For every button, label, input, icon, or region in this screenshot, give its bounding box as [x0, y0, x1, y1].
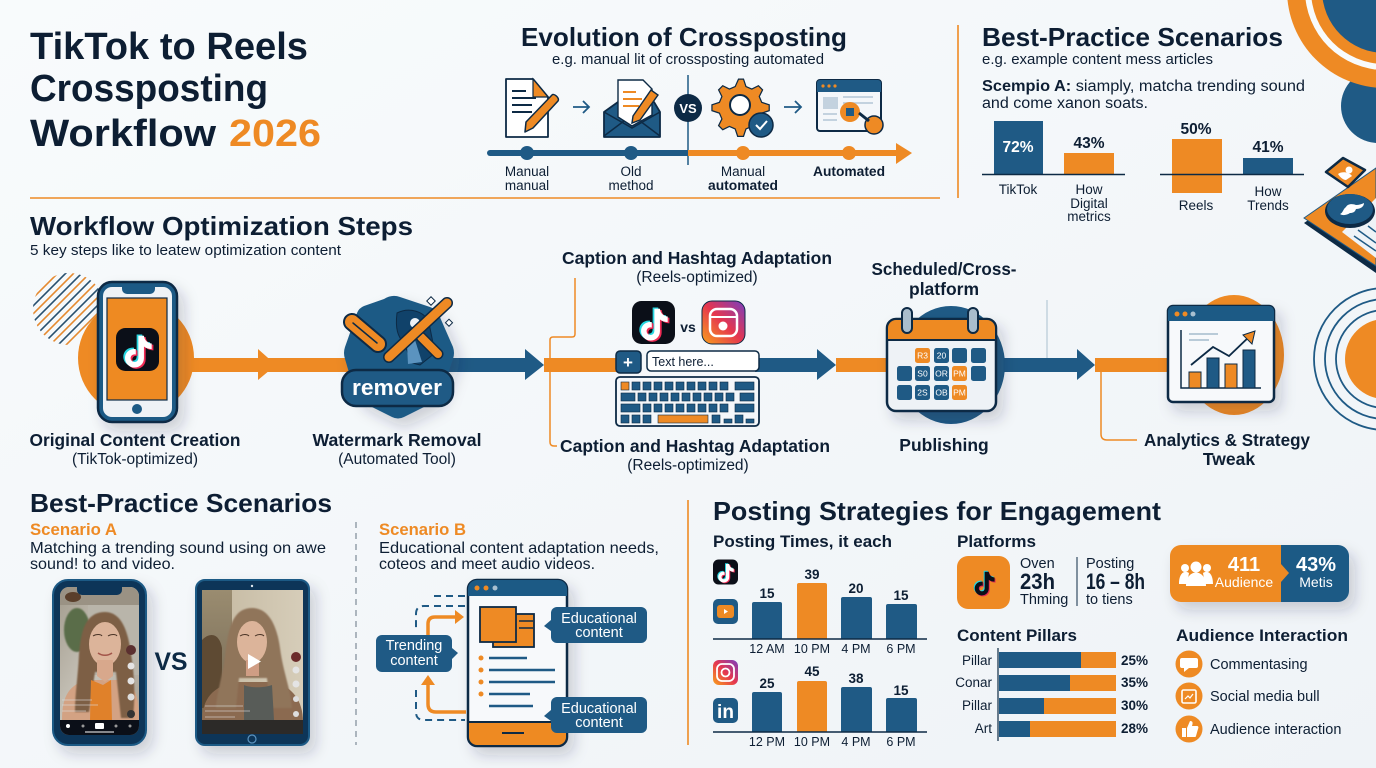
scenario b text [379, 520, 659, 573]
stacked bars: content pillars: 28% [1121, 721, 1148, 736]
bar chart: right: How [1254, 184, 1282, 199]
calendar cells: S0 [917, 368, 928, 378]
connectors [550, 278, 1137, 446]
heading: scenarios: Best-Practice Scenarios [30, 488, 332, 518]
arrow: doc to envelope [573, 101, 589, 113]
calendar body [887, 319, 996, 411]
text input [647, 351, 759, 371]
divider: bottom panels [687, 500, 689, 745]
timeline labels: manual [505, 178, 549, 193]
bar chart: left: TikTok [999, 182, 1037, 197]
arrow: gear to window [784, 101, 801, 113]
bar chart: posting times 1: 20 [848, 581, 864, 596]
step 1 label: (TikTok-optimized) [72, 451, 198, 468]
bar chart: left: 72% [1002, 139, 1034, 156]
item: audience interaction [1176, 716, 1341, 742]
step 2 label: (Automated Tool) [338, 451, 456, 468]
bubble: educational bottom: Educational [561, 701, 637, 717]
title: 2026 [229, 113, 321, 155]
subheading: platforms: Platforms [957, 533, 1036, 551]
stacked bars: content pillars: Pillar [962, 698, 992, 713]
metric card: Metis [1299, 574, 1333, 590]
timeline [490, 143, 912, 164]
timeline labels [505, 164, 885, 193]
step 3 label: (Reels-optimized) [627, 457, 749, 474]
icon: linkedin [713, 698, 738, 723]
subtitle: best practice: e.g. example content mess articles [982, 52, 1213, 68]
bar chart: left: 43% [1073, 135, 1105, 152]
bar chart: right [1160, 121, 1304, 213]
stat: oven [1020, 556, 1068, 608]
icon: automated window [817, 80, 883, 134]
step 4 heading label: platform [909, 279, 979, 299]
bubble: educational top: content [575, 625, 623, 641]
bar chart: left: How [1075, 182, 1103, 197]
bar chart: right: Trends [1247, 198, 1289, 213]
header divider [30, 25, 958, 198]
bar chart: posting times 2 [713, 664, 927, 749]
metric card: 411 [1228, 554, 1260, 576]
scenario b text: Educational content adaptation needs, [379, 540, 659, 557]
panel: best-practice scenarios top [982, 22, 1305, 224]
step 5 label [1144, 430, 1310, 469]
hatched circle [33, 273, 99, 345]
stat: posting: 16 – 8h [1086, 569, 1145, 594]
bar chart: posting times 1: 6 PM [886, 642, 916, 656]
blue disc [897, 306, 1005, 424]
scenario a text: sound! to and video. [30, 556, 175, 573]
orange arrows [428, 617, 466, 712]
bar chart: posting times 1 [713, 567, 927, 656]
step 2: watermark remover [342, 296, 454, 418]
phone: tiktok video [53, 580, 146, 745]
title: Crossposting [30, 68, 268, 110]
dashed paths [416, 596, 465, 720]
step 2 label: Watermark Removal [312, 430, 482, 450]
item: audience interaction: Audience interaction [1210, 722, 1341, 738]
timeline labels: Manual [505, 164, 549, 179]
calendar cells: OB [935, 388, 948, 398]
list: audience interaction [1176, 650, 1341, 742]
calendar cells: PM [953, 388, 966, 398]
title: TikTok to Reels [30, 26, 308, 68]
phone body [98, 282, 177, 422]
bubble: trending: content [390, 653, 438, 669]
icon: tiktok small [632, 301, 675, 344]
icon: youtube [713, 599, 738, 624]
step 4 heading label: Scheduled/Cross- [872, 259, 1017, 279]
heading: evolution: Evolution of Crossposting [521, 22, 847, 52]
text: vs large: VS [154, 648, 188, 676]
text: vs: vs [680, 319, 696, 335]
scenario a text: Matching a trending sound using on awe [30, 540, 326, 557]
step 5 label: Tweak [1203, 449, 1255, 469]
badge: vs: VS [679, 101, 697, 116]
step 3 heading label: Caption and Hashtag Adaptation [562, 248, 832, 268]
timeline labels: Manual [721, 164, 765, 179]
bubble: trending [376, 635, 458, 672]
bar chart: posting times 2: 10 PM [794, 735, 830, 749]
pill: remover: remover [352, 375, 442, 400]
calendar cells: 20 [937, 350, 946, 360]
bubble: educational bottom [544, 697, 647, 733]
decoration: top right rings [1287, 0, 1376, 143]
icon: instagram [713, 660, 738, 685]
text: scenario description [982, 78, 1305, 112]
stacked bars: content pillars: Conar [955, 675, 992, 690]
bar chart: posting times 1: 39 [804, 567, 820, 582]
bar chart: posting times 1: 15 [893, 588, 909, 603]
icon: reels [702, 301, 745, 344]
tablet: reels video [196, 580, 309, 745]
step 1 label: Original Content Creation [30, 430, 240, 450]
item: social media: Social media bull [1210, 689, 1320, 705]
icon: linkedin: in [717, 702, 734, 723]
step 1: phone [33, 273, 194, 438]
step 5 label: Analytics & Strategy [1144, 430, 1310, 450]
subheading: audience interaction: Audience Interaction [1176, 626, 1348, 645]
scenario a text [30, 520, 326, 573]
text: scenario description: Scempio A: siamply, matcha trending sound [982, 78, 1305, 95]
stacked bars: content pillars [955, 648, 1148, 741]
bar chart: right: 41% [1252, 139, 1284, 156]
panel: evolution of crossposting [490, 22, 912, 193]
panel: best-practice scenarios bottom [30, 488, 659, 746]
scenario b text: coteos and meet audio videos. [379, 556, 595, 573]
text input: Text here... [652, 355, 714, 369]
calendar cells: R3 [917, 350, 928, 360]
list lines [478, 656, 555, 706]
bar chart: posting times 2: 15 [893, 683, 909, 698]
calendar cells: PM [953, 368, 966, 378]
step 4 label: Publishing [899, 435, 989, 455]
bubble: trending: Trending [386, 638, 442, 654]
step 3 label: Caption and Hashtag Adaptation [560, 436, 830, 456]
bubble: educational top: Educational [561, 611, 637, 627]
stat: posting [1086, 556, 1145, 608]
bar chart: posting times 1: 4 PM [841, 642, 871, 656]
icon: gear [712, 79, 773, 137]
item: commenting [1176, 650, 1308, 678]
timeline labels: Old [620, 164, 642, 179]
bar chart: posting times 2: 6 PM [886, 735, 916, 749]
calendar cells [897, 348, 986, 400]
bar chart: posting times 1: 12 AM [749, 642, 785, 656]
phone mockup [468, 580, 567, 746]
timeline labels: automated [708, 178, 778, 193]
timeline labels: method [608, 178, 654, 193]
subheading: posting times: Posting Times, it each [713, 533, 892, 551]
blue blob [344, 296, 454, 418]
plus button [616, 351, 641, 373]
keyboard [616, 377, 759, 426]
dashed divider [355, 522, 357, 745]
step 3 heading label: (Reels-optimized) [636, 269, 758, 286]
stat: oven: 23h [1020, 569, 1055, 594]
stacked bars: content pillars: Pillar [962, 653, 992, 668]
heading: posting strategies: Posting Strategies for Engagement [713, 496, 1161, 526]
icon: document and pencil [506, 79, 558, 137]
icon: crossed pencil [352, 297, 453, 365]
metric card [1170, 545, 1349, 602]
scenario a text: Scenario A [30, 520, 117, 539]
content cards [480, 607, 534, 647]
scenario b text: Scenario B [379, 520, 466, 539]
step 3 label [560, 436, 830, 474]
heading: workflow: Workflow Optimization Steps [30, 211, 413, 241]
divider: vs line [687, 75, 689, 165]
stacked bars: content pillars: Art [975, 721, 992, 736]
bubble: educational bottom: content [575, 715, 623, 731]
bar chart: posting times 2: 25 [759, 676, 775, 691]
stacked bars: content pillars: 30% [1121, 698, 1148, 713]
step 2 label [312, 430, 482, 468]
bar chart: posting times 1: 10 PM [794, 642, 830, 656]
metric card: Audience [1215, 574, 1273, 590]
icon: people [1179, 562, 1213, 586]
step 3 heading label [562, 248, 832, 286]
subtitle: workflow: 5 key steps like to leatew optimization content [30, 243, 341, 259]
icon: tiktok [116, 328, 159, 371]
flow arrows [190, 349, 1170, 380]
bar chart: posting times 2: 45 [804, 664, 820, 679]
stat: oven: Thming [1020, 592, 1068, 608]
decoration: concentric rings [1314, 288, 1376, 430]
subheading: content pillars: Content Pillars [957, 626, 1077, 645]
bar chart: posting times 2: 12 PM [749, 735, 785, 749]
orange disc [78, 300, 194, 416]
stat: oven: Oven [1020, 556, 1055, 572]
icon: tiktok chart [713, 560, 738, 584]
panel: workflow steps [30, 205, 1310, 474]
item: social media [1176, 682, 1320, 710]
decoration: tilted device [1304, 158, 1376, 273]
calendar cells: OR [935, 368, 948, 378]
title [30, 26, 321, 155]
line chart and bars [1181, 330, 1261, 388]
metric card: 43% [1296, 554, 1336, 576]
step 4: calendar [887, 306, 1005, 424]
bar chart: left: Digital [1070, 196, 1108, 211]
orange disc [1184, 295, 1284, 415]
plus button: + [623, 353, 633, 372]
video still [60, 587, 139, 735]
bar chart: left: metrics [1067, 209, 1111, 224]
calendar cells: 2S [917, 388, 928, 398]
step 4 heading label [872, 259, 1017, 299]
bar chart: posting times 2: 4 PM [841, 735, 871, 749]
bar chart: right: Reels [1179, 198, 1214, 213]
scenario b diagram [376, 580, 647, 746]
timeline labels: Automated [813, 164, 885, 179]
title: Workflow [30, 113, 216, 155]
text: scenario description: and come xanon soats. [982, 95, 1148, 112]
stacked bars: content pillars: 25% [1121, 653, 1148, 668]
panel: posting strategies [713, 496, 1349, 749]
step 3: caption adaptation [616, 301, 759, 426]
badge: vs [674, 94, 702, 122]
window [1168, 306, 1274, 402]
step 5: analytics window [1168, 295, 1284, 415]
item: commenting: Commentasing [1210, 657, 1308, 673]
stat: posting: to tiens [1086, 592, 1133, 608]
stat: posting: Posting [1086, 556, 1134, 572]
bar chart: posting times 2: 38 [848, 671, 864, 686]
bar chart: right: 50% [1180, 121, 1212, 138]
icon: tiktok platform [957, 556, 1010, 609]
bar chart: left [982, 121, 1125, 224]
bar chart: posting times 1: 15 [759, 586, 775, 601]
bubble: educational top [544, 607, 647, 643]
subtitle: evolution: e.g. manual lit of crossposting automated [552, 52, 824, 68]
heading: best practice: Best-Practice Scenarios [982, 22, 1283, 52]
step 1 label [30, 430, 240, 468]
icon: envelope [604, 80, 660, 137]
video still [202, 590, 303, 734]
stacked bars: content pillars: 35% [1121, 675, 1148, 690]
